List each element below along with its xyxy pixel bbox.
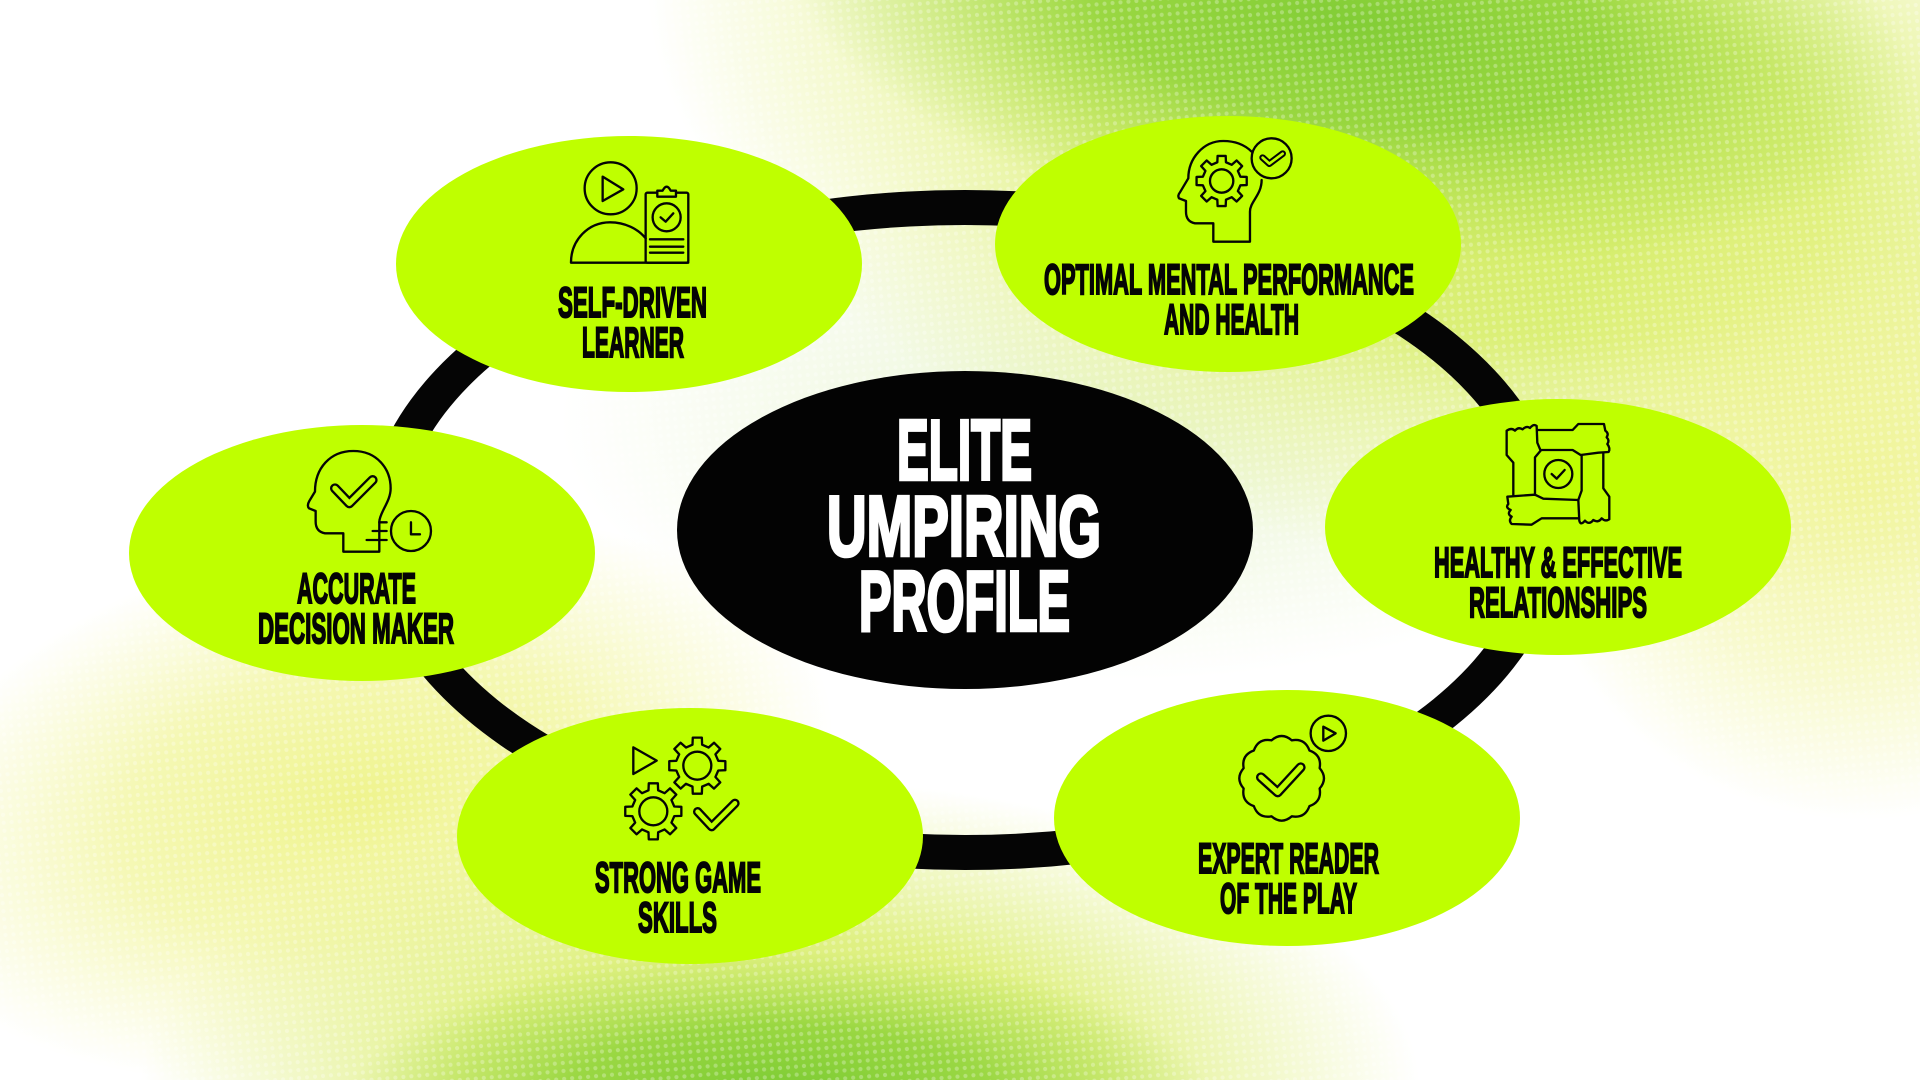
label — [595, 854, 761, 942]
label: RELATIONSHIPS — [1469, 579, 1647, 627]
label — [1198, 835, 1379, 923]
center oval: Elite Umpiring Profile — [677, 371, 1253, 689]
label — [558, 279, 707, 367]
panel: optimal mental performance and health — [995, 116, 1461, 372]
icon: four interlocked hands with check — [1507, 424, 1609, 525]
icon: gears, play and check — [625, 738, 735, 839]
panel: expert reader of the play — [1054, 690, 1520, 946]
connecting ring — [365, 190, 1565, 870]
label — [1434, 539, 1682, 627]
label: LEARNER — [582, 319, 684, 367]
icon: head with gear and check — [1178, 138, 1292, 242]
icon: badge with check and play button — [1239, 716, 1346, 821]
label: SELF-DRIVEN — [558, 279, 707, 327]
label: DECISION MAKER — [258, 605, 454, 653]
center oval: Elite Umpiring Profile: UMPIRING — [827, 480, 1101, 574]
label: SKILLS — [638, 894, 717, 942]
center oval: Elite Umpiring Profile: PROFILE — [859, 554, 1070, 650]
label: OF THE PLAY — [1220, 875, 1357, 923]
label: AND HEALTH — [1164, 296, 1299, 344]
label — [258, 565, 454, 653]
center oval: Elite Umpiring Profile: ELITE — [897, 404, 1032, 498]
label — [1044, 256, 1414, 344]
panel: strong game skills — [457, 708, 923, 964]
label: OPTIMAL MENTAL PERFORMANCE — [1044, 256, 1414, 304]
panel: accurate decision maker — [129, 425, 595, 681]
panel: self-driven learner — [396, 136, 862, 392]
label: HEALTHY & EFFECTIVE — [1434, 539, 1682, 587]
label: ACCURATE — [297, 565, 416, 613]
panel: expert reader of the play: EXPERT READER — [1198, 835, 1379, 883]
label: STRONG GAME — [595, 854, 761, 902]
panel: healthy and effective relationships — [1325, 399, 1791, 655]
icon: head with check and clock — [308, 451, 431, 552]
icon: learner with play button and clipboard — [571, 162, 688, 263]
